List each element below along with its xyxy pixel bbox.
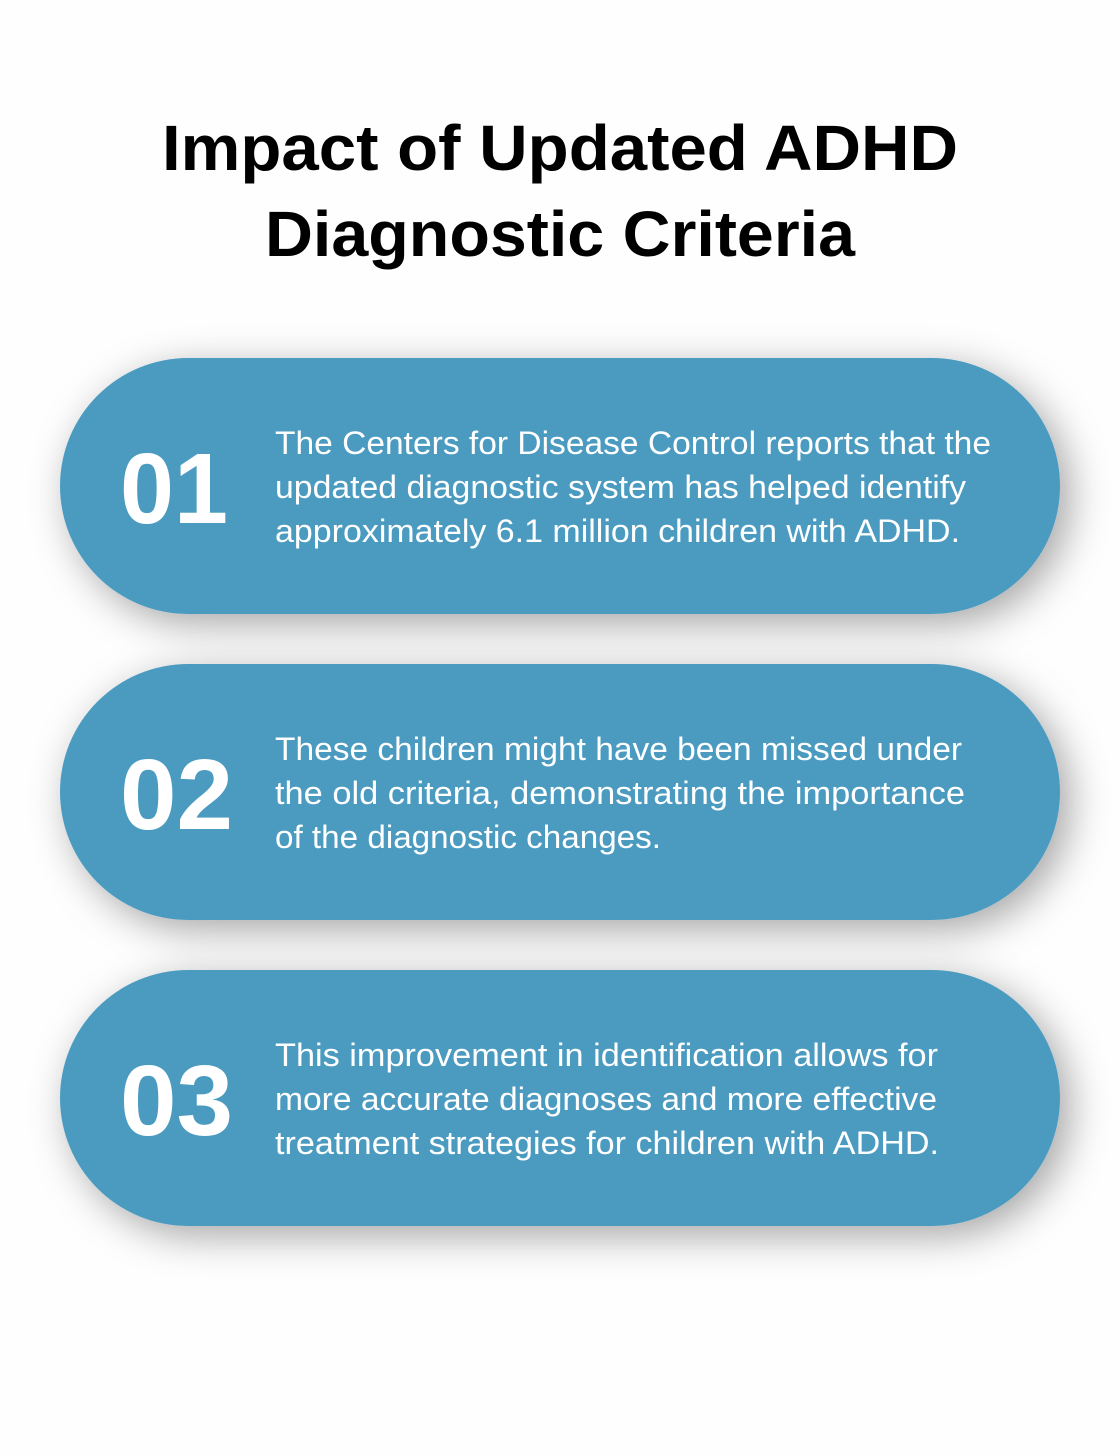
text block 02: the old criteria, demonstrating the importance (275, 775, 965, 811)
text block 03 (275, 1037, 939, 1161)
text block 03: treatment strategies for children with ADHD. (275, 1125, 939, 1161)
title: Impact of Updated ADHD (162, 112, 958, 184)
text block 02 (275, 731, 965, 855)
pill background 01 (60, 358, 1060, 614)
text block 01: updated diagnostic system has helped identify (275, 469, 966, 505)
text block 02: of the diagnostic changes. (275, 819, 661, 855)
text block 03: This improvement in identification allows for (275, 1037, 938, 1073)
pill background 02 (60, 664, 1060, 920)
number 01: 01 (120, 433, 228, 545)
text block 01: approximately 6.1 million children with ADHD. (275, 513, 960, 549)
number 03: 03 (120, 1045, 233, 1157)
panel: step 03 (60, 970, 1060, 1226)
text block 03: more accurate diagnoses and more effective (275, 1081, 937, 1117)
title: Diagnostic Criteria (265, 198, 855, 270)
text block 02: These children might have been missed under (275, 731, 962, 767)
text block 01: The Centers for Disease Control reports that the (275, 425, 991, 461)
number 02: 02 (120, 739, 233, 851)
text block 01 (275, 425, 991, 549)
panel: step 01 (60, 358, 1060, 614)
title (162, 112, 958, 270)
pill background 03 (60, 970, 1060, 1226)
panel: step 02 (60, 664, 1060, 920)
